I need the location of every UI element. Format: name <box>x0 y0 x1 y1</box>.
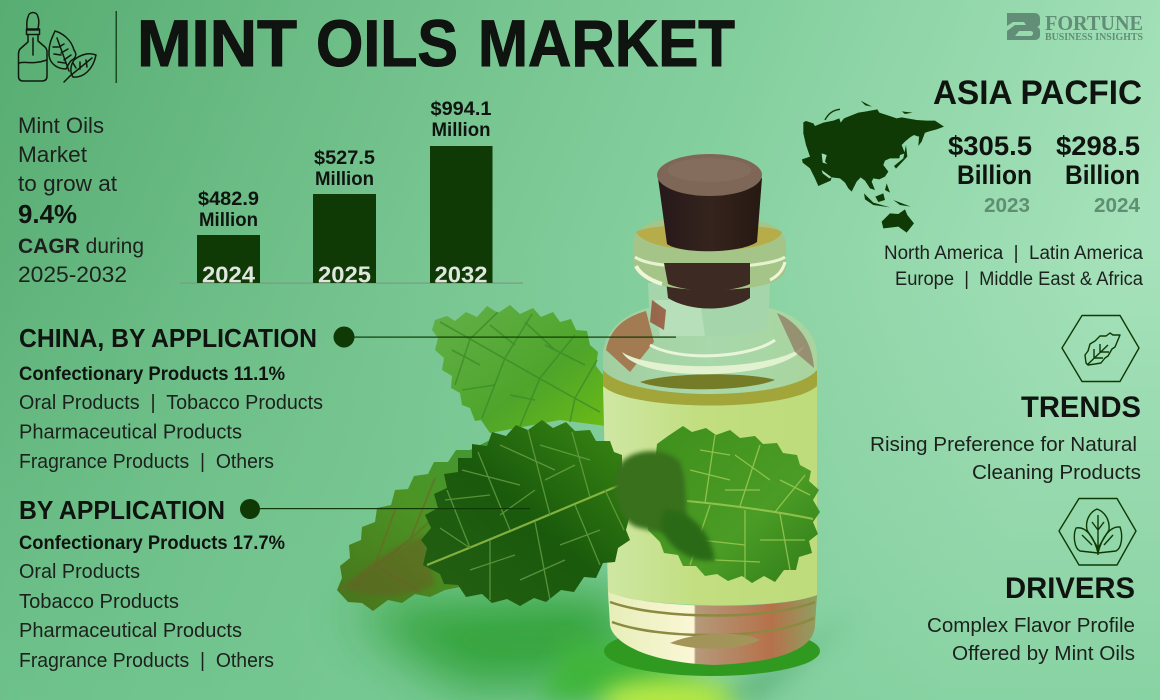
list: Oral Products | Tobacco Products <box>19 392 323 414</box>
base glass <box>608 592 817 665</box>
heading: trends: TRENDS <box>1021 391 1141 424</box>
leaf cluster center <box>615 451 715 561</box>
list: Tobacco Products <box>19 591 179 613</box>
bar: 2024 <box>197 189 260 288</box>
reflected cork <box>664 263 750 308</box>
cork <box>658 178 762 251</box>
shoulder glass <box>603 308 817 405</box>
stat: 2024 <box>1056 131 1141 217</box>
rim <box>633 216 786 290</box>
list <box>19 533 285 672</box>
text block: CAGR summary: 2025-2032 <box>18 262 127 287</box>
bottle <box>603 154 820 676</box>
list: Confectionary Products 17.7% <box>19 533 285 554</box>
bar: 2024: $482.9 <box>198 189 259 210</box>
section: by application <box>19 495 530 672</box>
list: Pharmaceutical Products <box>19 620 242 642</box>
bar: 2024: 2024 <box>202 262 255 288</box>
shadow under bottle <box>604 626 820 676</box>
text block: CAGR summary: Mint Oils <box>18 113 104 138</box>
text block: trends <box>870 434 1141 484</box>
heading: CHINA, BY APPLICATION <box>19 323 317 353</box>
list: Confectionary Products 11.1% <box>19 364 285 385</box>
stat: 2023: Billion <box>957 160 1032 190</box>
title: MARKET <box>478 6 735 80</box>
list: Fragrance Products | Others <box>19 650 274 672</box>
list: Pharmaceutical Products <box>19 422 242 444</box>
section: China by application <box>19 323 676 473</box>
bar: 2032: Million <box>432 120 490 141</box>
heading: drivers: DRIVERS <box>1005 572 1135 605</box>
map: Asia Pacific <box>802 101 944 233</box>
leaf: front right <box>648 426 820 583</box>
heading: BY APPLICATION <box>19 495 225 525</box>
stat: 2024: Billion <box>1065 160 1140 190</box>
icon: trends hexagon leaf <box>1062 316 1139 382</box>
text block: regions: North America | Latin America <box>884 243 1143 264</box>
stat: 2023 <box>948 131 1032 217</box>
text block: drivers: Offered by Mint Oils <box>952 643 1135 665</box>
bar: 2024: Million <box>199 210 258 231</box>
stat: 2024: 2024 <box>1094 195 1141 217</box>
list <box>19 364 323 473</box>
text block: regions: Europe | Middle East & Africa <box>895 269 1143 290</box>
list: Oral Products <box>19 561 140 583</box>
connector: dot and line <box>334 326 676 348</box>
title: MINT <box>137 6 297 80</box>
logo: Fortune Business Insights: BUSINESS INSIGHTS <box>1045 32 1143 43</box>
logo: Fortune Business Insights <box>1007 11 1143 43</box>
bar: 2025: 2025 <box>318 262 371 288</box>
text block: drivers <box>927 615 1135 665</box>
list: Fragrance Products | Others <box>19 451 274 473</box>
text block: CAGR summary: Market <box>18 142 87 167</box>
stat: 2023: $305.5 <box>948 131 1032 161</box>
title: OILS <box>316 6 458 80</box>
text block: CAGR summary <box>18 113 144 287</box>
bar: 2025: Million <box>315 169 374 190</box>
bar chart: market size <box>180 99 523 288</box>
bar: 2032: $994.1 <box>430 99 492 120</box>
icon: oil bottle and leaves <box>18 12 96 82</box>
bar: 2025: $527.5 <box>314 148 375 169</box>
text block: trends: Rising Preference for Natural <box>870 434 1137 456</box>
icon: drivers hexagon leaves <box>1059 498 1136 565</box>
bar: 2032 <box>430 99 492 288</box>
leaf: upper back <box>432 305 606 433</box>
heading: Asia Pacific: ASIA PACFIC <box>933 74 1142 112</box>
leaf: front left <box>421 420 630 606</box>
text block: CAGR summary: 9.4% <box>18 199 77 229</box>
liquid <box>603 385 817 605</box>
stat: 2024: $298.5 <box>1056 131 1140 161</box>
text block: regions <box>884 243 1143 290</box>
title <box>137 6 735 80</box>
text block: CAGR summary: CAGR during <box>18 235 144 258</box>
text block: trends: Cleaning Products <box>972 462 1141 484</box>
text block: drivers: Complex Flavor Profile <box>927 615 1135 637</box>
logo: Fortune Business Insights: FORTUNE <box>1045 11 1143 35</box>
leaf: lower back <box>337 440 540 611</box>
bar: 2025 <box>313 148 376 288</box>
divider: header <box>116 11 117 83</box>
stat: 2023: 2023 <box>984 195 1030 217</box>
text block: CAGR summary: to grow at <box>18 171 117 196</box>
bar: 2032: 2032 <box>434 262 488 288</box>
neck <box>648 283 770 336</box>
connector: dot and line <box>240 499 530 519</box>
